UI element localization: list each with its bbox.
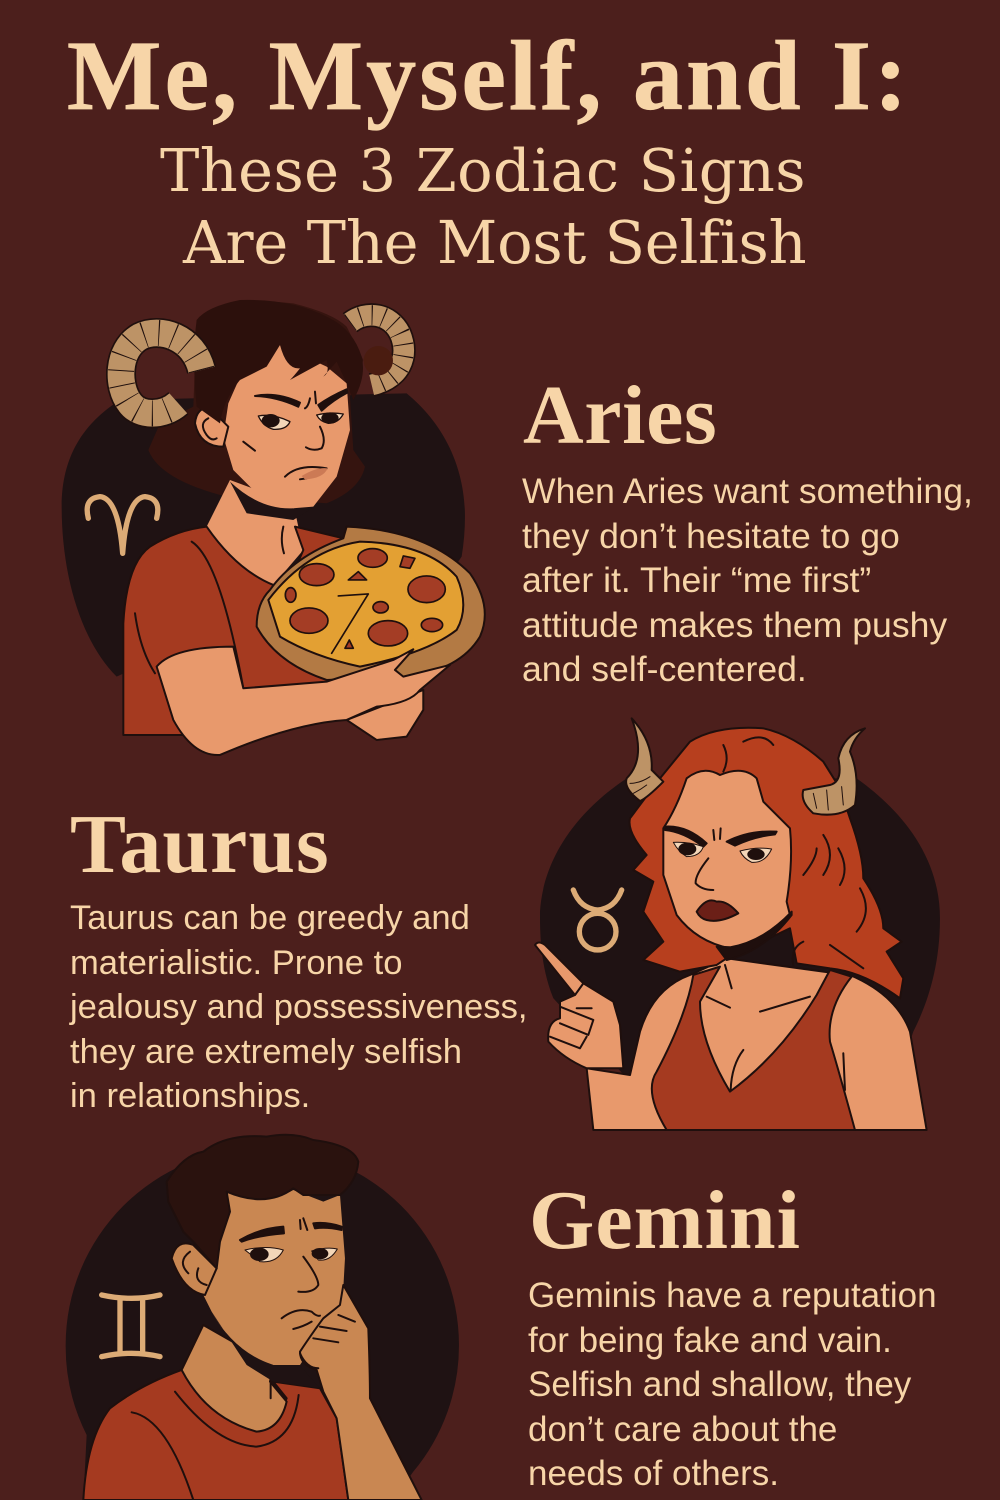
title: Me, Myself, and I: — [67, 20, 911, 131]
taurus illustration — [535, 718, 940, 1130]
text: aries: they don’t hesitate to go — [522, 516, 900, 556]
subtitle: These 3 Zodiac Signs — [160, 136, 806, 205]
text: gemini — [528, 1276, 937, 1493]
heading: gemini: Gemini — [529, 1174, 801, 1267]
text: aries: after it. Their “me first” — [522, 560, 871, 600]
text: gemini: needs of others. — [528, 1454, 779, 1493]
text: taurus — [69, 899, 527, 1115]
text: gemini: don’t care about the — [528, 1410, 837, 1448]
text: aries: and self-centered. — [522, 649, 807, 689]
text: taurus: they are extremely selfish — [70, 1032, 462, 1070]
text: aries — [522, 471, 973, 689]
text: taurus: Taurus can be greedy and — [70, 899, 470, 937]
subtitle: Are The Most Selfish — [183, 208, 806, 277]
text: gemini: Selfish and shallow, they — [528, 1365, 911, 1404]
heading: aries: Aries — [523, 369, 717, 462]
text: taurus: in relationships. — [70, 1077, 310, 1115]
subtitle — [160, 136, 806, 277]
gemini illustration — [66, 1135, 459, 1500]
text: aries: attitude makes them pushy — [522, 604, 947, 644]
text: taurus: jealousy and possessiveness, — [70, 988, 527, 1026]
text: aries: When Aries want something, — [522, 471, 973, 511]
aries illustration — [62, 300, 485, 755]
text: gemini: Geminis have a reputation — [528, 1276, 937, 1315]
heading: taurus: Taurus — [70, 798, 330, 891]
text: gemini: for being fake and vain. — [528, 1320, 892, 1360]
text: taurus: materialistic. Prone to — [70, 944, 402, 982]
